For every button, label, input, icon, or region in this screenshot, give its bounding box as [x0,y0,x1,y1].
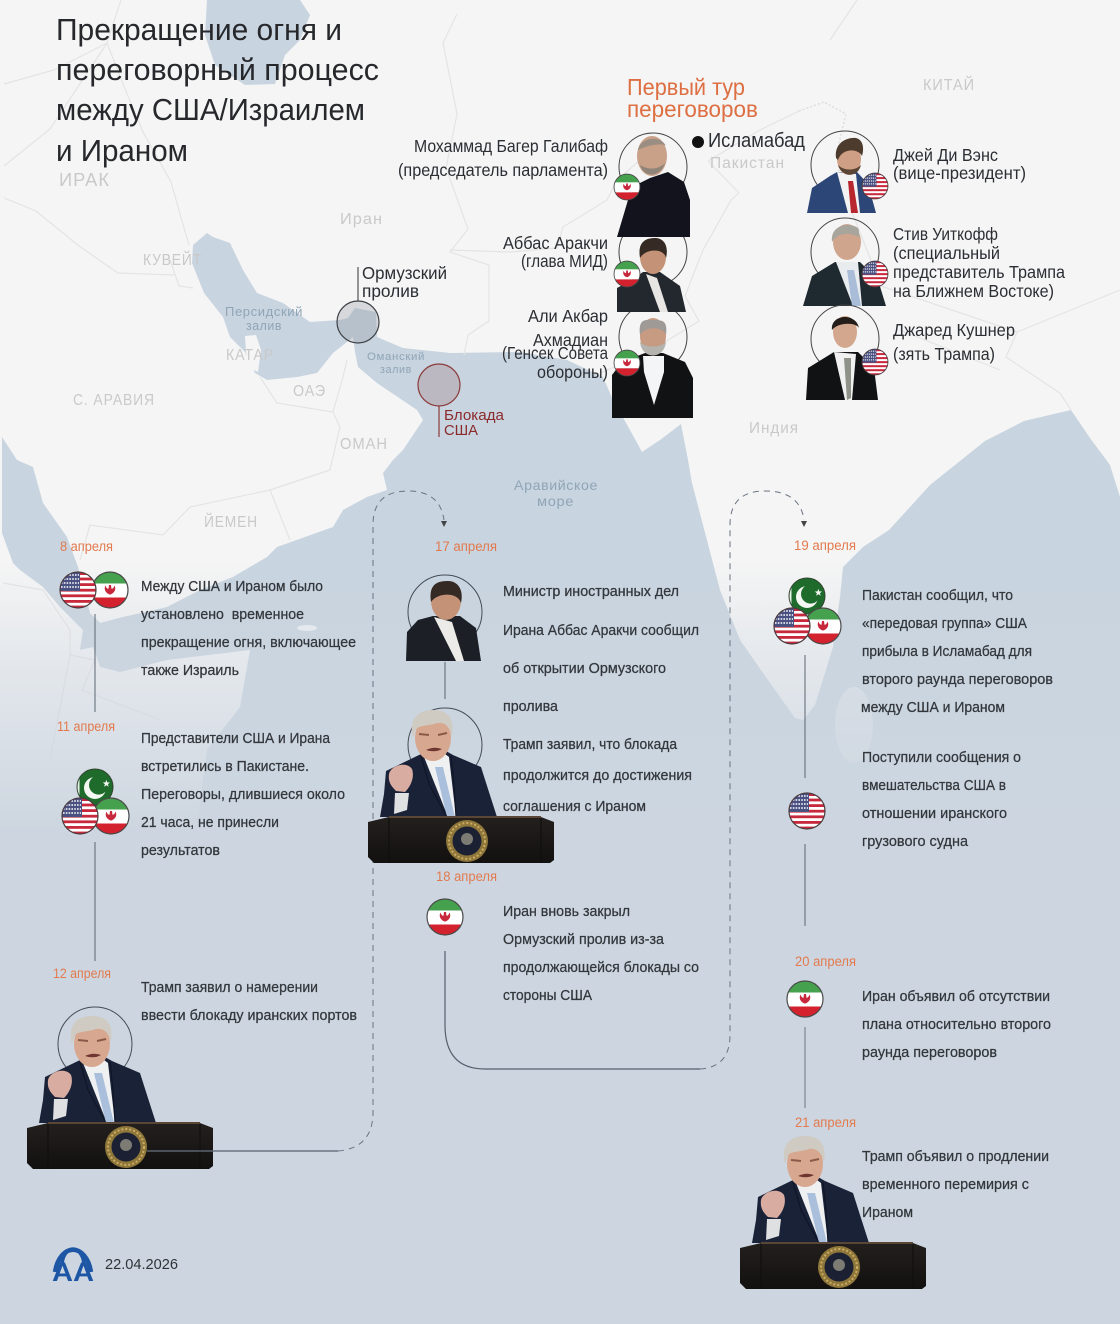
event: 18 April [427,869,699,1004]
event: 8 April: Между США и Ираном было [141,579,323,595]
event: 18 April: Ормузский пролив из-за [503,932,665,948]
event: 21 April: 21 апреля [795,1115,856,1130]
portrait: Galibaf [614,133,690,237]
event: 20 April: Иран объявил об отсутствии [862,989,1050,1005]
callout: US blockade: Блокада [444,407,505,424]
text: Iranian delegation names: (председатель парламента) [398,160,608,180]
event: 20 April: 20 апреля [795,954,856,969]
event: 11 April: 21 часа, не принесли [141,815,279,831]
portrait: Kushner [806,305,888,400]
map labels: Аравийское [514,477,598,493]
event: 18 April: продолжающейся блокады со [503,960,699,976]
map labels: ОМАН [340,436,388,453]
heading: first round of talks [627,74,758,122]
text: Iranian delegation names: (глава МИД) [521,251,608,271]
callout: Strait of Hormuz: пролив [362,281,419,301]
event: 19 April: отношении иранского [862,806,1007,822]
title: Прекращение огня и [56,12,342,47]
text: US delegation names: на Ближнем Востоке) [893,281,1054,301]
event: 17 April: Ирана Аббас Аракчи сообщил [503,623,699,639]
event: 19 April: «передовая группа» США [862,616,1027,632]
map labels: море [537,493,574,509]
text: US delegation names: Джей Ди Вэнс [893,145,998,165]
callout: US blockade: США [444,422,478,439]
text: US delegation names: представитель Трампа [893,262,1065,282]
event: 20 April: плана относительно второго [862,1017,1051,1033]
event: 8 April: установлено временное [141,607,304,623]
event: 20 April [787,954,1051,1108]
map labels [59,75,975,531]
map labels: Индия [749,420,799,437]
event: 12 April: ввести блокаду иранских портов [141,1008,357,1024]
title: переговорный процесс [56,52,379,87]
event: 8 April [60,539,356,712]
event: 19 April: Пакистан сообщил, что [862,588,1013,604]
title: между США/Израилем [56,92,365,127]
event: 21 April: Трамп объявил о продлении [862,1149,1049,1165]
map labels: Пакистан [710,155,785,172]
connector: column 2 to column 3 [445,491,807,1069]
event: 19 April: грузового судна [862,834,969,850]
map labels: залив [246,318,282,333]
event: 11 April: результатов [141,843,220,859]
event: 8 April: также Израиль [141,663,239,679]
portrait: Ahmadian [612,303,693,418]
event: 18 April: стороны США [503,988,592,1004]
event: 20 April: раунда переговоров [862,1045,997,1061]
map labels: КАТАР [226,347,274,364]
title [56,12,379,168]
connector: column 1 to column 2 [140,491,447,1151]
map labels: КИТАЙ [923,75,975,94]
text: US delegation names: (зять Трампа) [893,344,995,364]
event: 19 April: Поступили сообщения о [862,750,1021,766]
event: 17 April: соглашения с Ираном [503,799,646,815]
map labels: КУВЕЙТ [143,250,202,269]
event: 19 April: прибыла в Исламабад для [862,644,1032,660]
map labels: ИРАК [59,170,110,190]
event: 17 April: продолжится до достижения [503,768,692,784]
text: US delegation names: Джаред Кушнер [893,320,1015,340]
marker: Islamabad: Исламабад [708,130,805,152]
event: 11 April: встретились в Пакистане. [141,759,309,775]
event: 12 April: Трамп заявил о намерении [141,980,318,996]
portrait: Witkoff [803,218,888,306]
text: Iranian delegation names: Мохаммад Багер Галибаф [414,136,608,156]
event: 17 April: 17 апреля [435,539,497,554]
text: US delegation names: (специальный [893,243,1000,263]
map labels: Персидский [225,304,303,319]
event: 21 April: временного перемирия с [862,1177,1029,1193]
event: 19 April: вмешательства США в [862,778,1006,794]
map labels: ЙЕМЕН [204,512,258,531]
text: Iranian delegation names: Аббас Аракчи [503,233,608,253]
event: 11 April: Представители США и Ирана [141,731,331,747]
event: 19 April [774,538,1053,926]
portrait: Araghchi [614,218,687,312]
event: 11 April [57,719,345,961]
event: 17 April: пролива [503,699,559,715]
map labels: залив [380,364,412,376]
event: 19 April: между США и Ираном [861,700,1005,716]
event: 8 April: 8 апреля [60,539,113,554]
event: 21 April: Ираном [862,1205,913,1221]
heading: first round of talks: переговоров [627,96,758,122]
text: Iranian delegation names: Али Акбар [528,306,608,326]
text: Iranian delegation names [398,136,608,382]
text: Iranian delegation names: обороны) [537,362,608,382]
event: 17 April: Трамп заявил, что блокада [503,737,678,753]
sea: Caspian Sea [205,0,310,85]
text: US delegation names [893,145,1065,364]
event: 17 April: об открытии Ормузского [503,661,666,677]
text: US delegation names: Стив Уиткофф [893,224,998,244]
text: Iranian delegation names: Ахмадиан [533,330,608,350]
logo: Anadolu Agency: AA [52,1257,94,1287]
event: 8 April: прекращение огня, включающее [141,635,356,651]
text: Iranian delegation names: (Генсек Совета [502,343,608,363]
event: 18 April: 18 апреля [436,869,497,884]
date: 22.04.2026 [105,1257,178,1273]
map labels: Иран [340,211,383,228]
event: 12 April: 12 апреля [53,966,111,981]
callout: US blockade [418,364,505,439]
event: 12 April [27,966,357,1169]
title: и Ираном [56,133,188,168]
event: 21 April [740,1115,1049,1289]
map labels: Оманский [367,351,425,363]
map labels: С. АРАВИЯ [73,392,155,409]
callout: Strait of Hormuz [337,263,447,343]
event: 17 April: Министр иностранных дел [503,584,679,600]
event: 19 April: второго раунда переговоров [862,672,1053,688]
text: US delegation names: (вице-президент) [893,163,1026,183]
map labels: ОАЭ [293,383,326,400]
event: 19 April: 19 апреля [794,538,856,553]
event: 17 April [368,539,699,863]
event: 11 April: 11 апреля [57,719,115,734]
event: 11 April: Переговоры, длившиеся около [141,787,345,803]
callout: Strait of Hormuz: Ормузский [362,263,447,283]
heading: first round of talks: Первый тур [627,74,745,100]
event: 18 April: Иран вновь закрыл [503,904,630,920]
portrait: Vance [807,131,888,213]
